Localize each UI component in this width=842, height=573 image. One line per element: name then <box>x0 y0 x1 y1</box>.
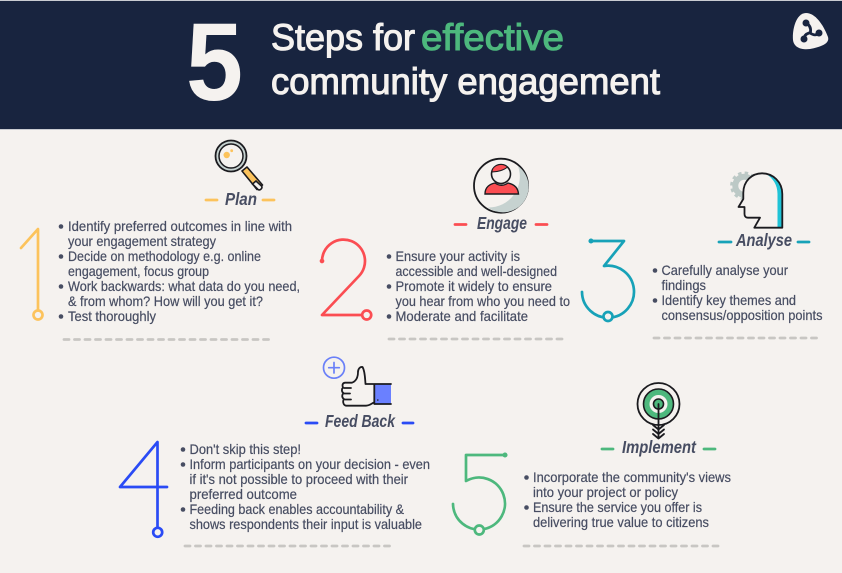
title: effective <box>421 17 564 58</box>
bullet list <box>59 219 300 324</box>
bullet list: Decide on methodology e.g. online <box>68 249 261 264</box>
bullet list: Moderate and facilitate <box>396 309 528 324</box>
heading: Feed Back: Feed Back <box>325 411 396 431</box>
icon: person <box>474 159 529 213</box>
heading: Engage: Engage <box>477 213 527 233</box>
step 3: Analyse <box>582 173 823 338</box>
step 4: Feed Back <box>120 357 430 546</box>
number 4 <box>120 442 167 537</box>
bullet list: Identify key themes and <box>662 293 796 308</box>
bullet list: Feeding back enables accountability & <box>190 502 404 517</box>
bullet list: Test thoroughly <box>68 309 156 324</box>
big number 5: 5 <box>186 1 243 124</box>
bullet list: shows respondents their input is valuable <box>190 517 422 532</box>
number 1 <box>21 229 42 320</box>
bullet list <box>653 263 823 323</box>
icon: target with arrow <box>638 383 680 438</box>
header band <box>0 0 842 130</box>
bullet list: if it's not possible to proceed with their <box>190 472 408 487</box>
bullet list: into your project or policy <box>533 485 678 500</box>
title <box>271 17 661 102</box>
bullet list: Ensure your activity is <box>396 249 520 264</box>
heading: Analyse: Analyse <box>735 230 792 250</box>
bullet list: Work backwards: what data do you need, <box>68 279 300 294</box>
number 3 <box>582 240 634 321</box>
bullet list <box>387 249 570 324</box>
step 5: Implement <box>453 383 731 546</box>
heading: Plan <box>206 189 274 209</box>
logo <box>793 13 828 49</box>
bullet list: accessible and well-designed <box>396 264 557 279</box>
bullet list: you hear from who you need to <box>396 294 570 309</box>
bullet list <box>524 470 731 530</box>
icon: magnifying glass <box>216 140 262 190</box>
bullet list: Ensure the service you offer is <box>533 500 702 515</box>
number 5 <box>453 454 506 534</box>
number 2 <box>321 240 371 320</box>
bullet list: findings <box>662 278 706 293</box>
bullet list: Don't skip this step! <box>190 442 301 457</box>
heading: Implement: Implement <box>622 437 697 457</box>
icon: thumbs up <box>324 357 391 406</box>
bullet list: Promote it widely to ensure <box>396 279 552 294</box>
bullet list: Incorporate the community's views <box>533 470 731 485</box>
bullet list: Carefully analyse your <box>662 263 788 278</box>
heading: Engage <box>455 213 547 233</box>
icon: head with gear <box>732 173 782 228</box>
bullet list: engagement, focus group <box>68 264 209 279</box>
bullet list: preferred outcome <box>190 487 297 502</box>
step 1: Plan <box>21 140 300 340</box>
bullet list: Identify preferred outcomes in line with <box>68 219 292 234</box>
bullet list: your engagement strategy <box>68 234 216 249</box>
bullet list: consensus/opposition points <box>662 308 823 323</box>
bullet list: & from whom? How will you get it? <box>68 294 263 309</box>
title: community engagement <box>271 61 661 102</box>
bullet list: delivering true value to citizens <box>533 515 709 530</box>
bullet list: Inform participants on your decision - even <box>190 457 430 472</box>
step 2: Engage <box>321 159 570 339</box>
bullet list <box>181 442 430 532</box>
title: Steps for <box>271 17 415 58</box>
heading: Plan: Plan <box>225 189 257 209</box>
